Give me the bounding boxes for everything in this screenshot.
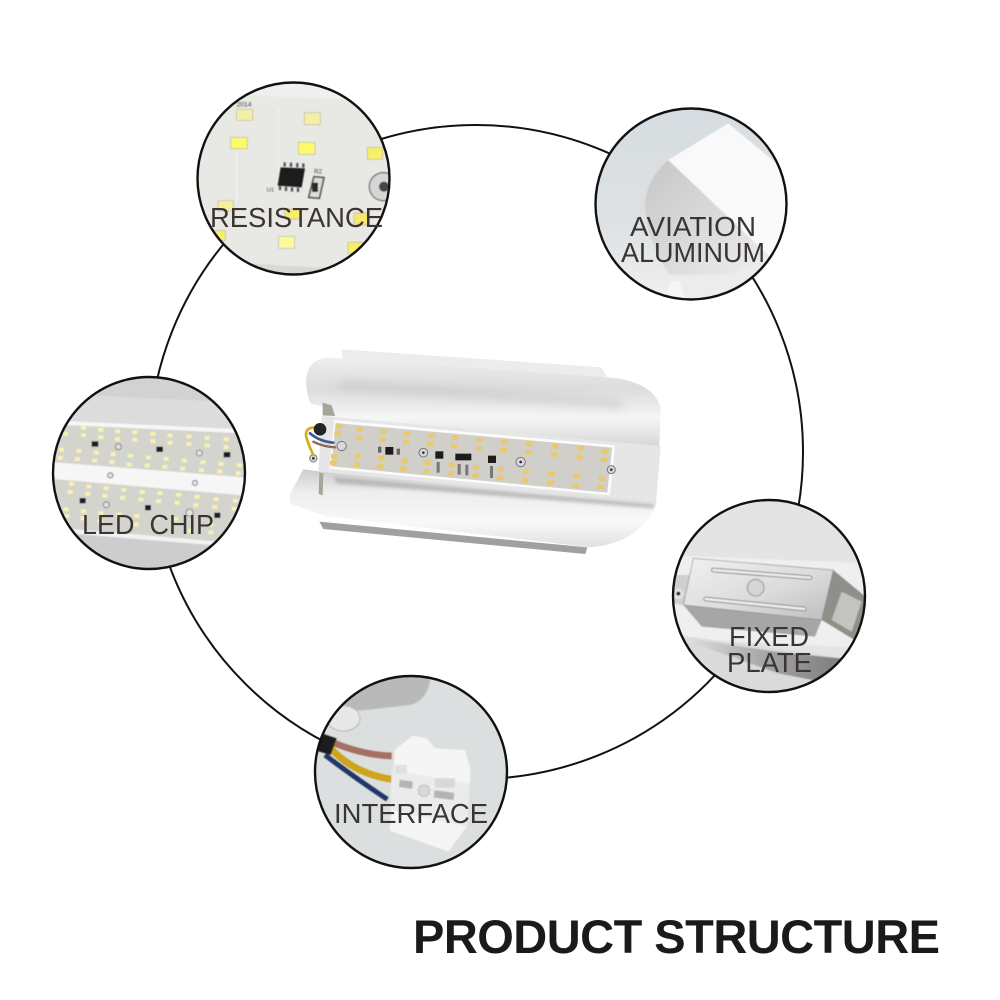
upper reflector [306, 358, 661, 447]
outline [673, 500, 865, 692]
panel: fixed plate [672, 498, 866, 694]
IC chip [278, 167, 305, 187]
cable gland [314, 423, 326, 436]
grey underside strip [319, 522, 587, 554]
ridges [706, 570, 810, 609]
detail photo: circuit board: R2 [314, 168, 323, 175]
label: aviation aluminum: AVIATION [630, 211, 756, 242]
label: led chip: LED CHIP [82, 509, 214, 540]
LED dots [58, 426, 242, 534]
detail photo: aluminum edge [645, 124, 786, 294]
screw [368, 171, 388, 202]
panel: led chip [52, 376, 246, 570]
centre dimple [747, 579, 764, 596]
LED chips [330, 424, 609, 489]
lower reflector band [684, 636, 815, 690]
outline [315, 676, 507, 868]
panel: interface [315, 670, 507, 868]
detail photo: circuit board [214, 101, 388, 274]
black components [80, 441, 230, 518]
label: resistance: RESISTANCE [210, 202, 383, 233]
left bracket [319, 403, 335, 495]
outline [198, 82, 390, 274]
label: interface: INTERFACE [334, 798, 488, 829]
soft shading [340, 380, 623, 408]
central LED flood light [290, 349, 661, 554]
label: aviation aluminum: ALUMINUM [621, 237, 765, 268]
title: PRODUCT STRUCTURE [413, 910, 940, 963]
outline [596, 108, 786, 300]
detail photo: mounting plate [674, 556, 864, 690]
driver components [378, 447, 496, 478]
mounting screws [310, 441, 615, 474]
label: fixed plate [727, 621, 812, 678]
detail photo: wire connector [317, 670, 471, 852]
screw centres [312, 451, 613, 471]
panel: resistance [196, 81, 391, 276]
board markings: 2014 [237, 102, 252, 109]
LED board [329, 420, 615, 495]
rail [318, 416, 661, 503]
outline [53, 377, 245, 569]
detail photo: circuit board: U1 [267, 188, 274, 194]
resistor [309, 177, 324, 198]
connector body [390, 736, 471, 852]
rail shadow [333, 477, 655, 508]
lower reflector [290, 469, 657, 547]
label: fixed plate: PLATE [727, 647, 812, 678]
connecting ring [149, 125, 803, 779]
screws [103, 444, 202, 516]
label: fixed plate: FIXED [729, 621, 809, 652]
rear flap [342, 349, 608, 379]
detail photo: LED strips [54, 378, 244, 568]
wires [325, 743, 392, 799]
panel: aviation aluminum [596, 108, 797, 307]
label: aviation aluminum [621, 211, 765, 268]
SMD LEDs [214, 109, 383, 254]
wires [306, 427, 335, 455]
